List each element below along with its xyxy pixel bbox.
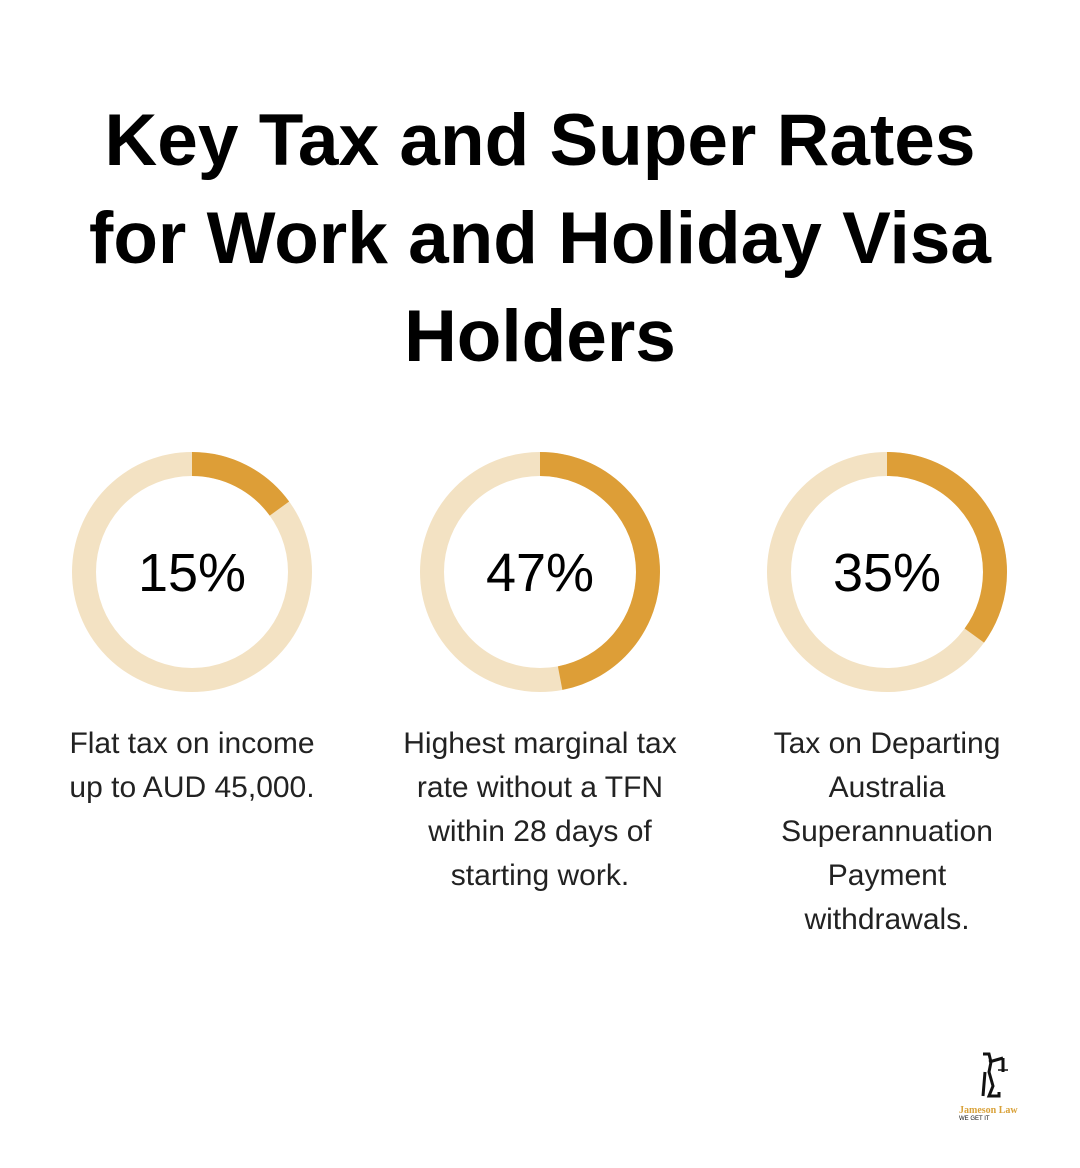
donut: 15% xyxy=(84,464,300,680)
logo xyxy=(959,1052,1018,1122)
donut: 35% xyxy=(779,464,995,680)
donut: 47%: 47% xyxy=(486,543,594,603)
caption 2: Highest marginal tax rate without a TFN within 28 days of starting work. xyxy=(403,727,677,892)
title: Holders xyxy=(404,296,676,377)
donut: 47% xyxy=(432,464,648,680)
title: for Work and Holiday Visa xyxy=(89,198,991,279)
logo: WE GET IT xyxy=(959,1116,990,1122)
caption 3: Tax on Departing Australia Superannuation Payment withdrawals. xyxy=(774,727,1000,936)
donut: 15%: 15% xyxy=(138,543,246,603)
caption 1: Flat tax on income up to AUD 45,000. xyxy=(69,727,315,804)
title xyxy=(89,100,992,377)
donut: 35%: 35% xyxy=(833,543,941,603)
logo: Jameson Law xyxy=(959,1105,1018,1116)
donut charts xyxy=(72,452,1007,692)
title: Key Tax and Super Rates xyxy=(105,100,975,181)
